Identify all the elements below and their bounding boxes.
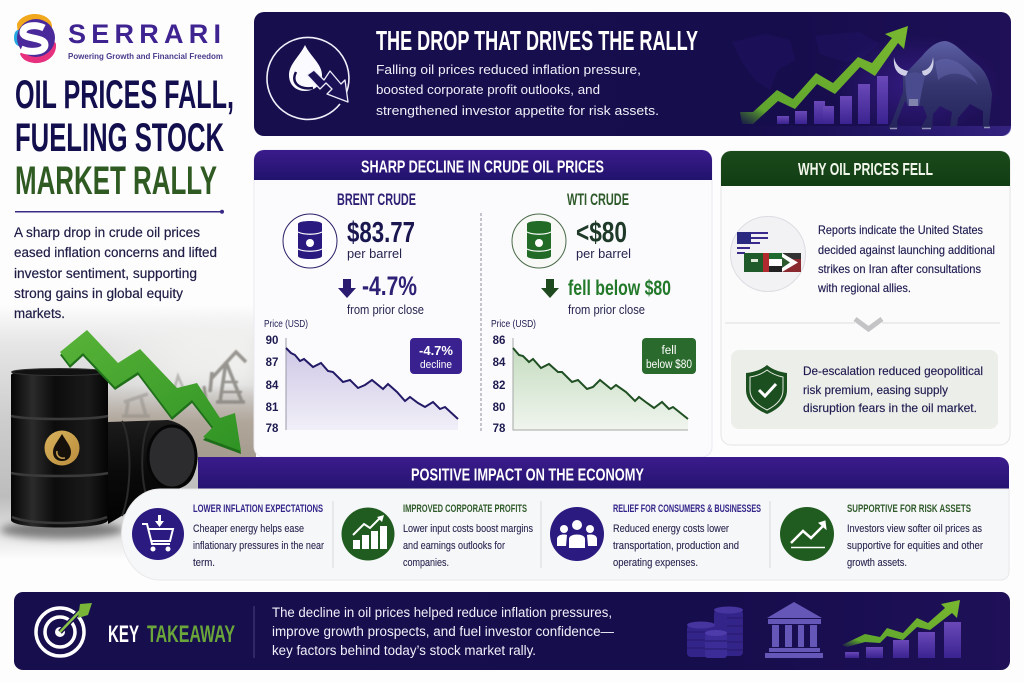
brent line chart: 81 (266, 402, 279, 414)
banner text: strengthened investor appetite for risk assets. (376, 103, 659, 118)
icon: wti down arrow (541, 279, 559, 298)
wti line chart: Price (USD) (491, 318, 536, 330)
rising bar chart (777, 76, 888, 124)
card: relief for consumers (550, 503, 761, 569)
card: improved profits: companies. (403, 557, 449, 569)
card: lower inflation (132, 503, 324, 569)
impact cards band (122, 489, 1009, 580)
card: improved profits: and earnings outlooks for (403, 540, 505, 552)
logo mark (14, 14, 56, 63)
brent line chart: Price (USD) (264, 318, 308, 330)
takeaway text: The decline in oil prices helped reduce inflation pressures, (272, 605, 612, 620)
card: risk assets: growth assets. (847, 557, 907, 569)
wti line chart: 86 (493, 335, 505, 347)
title: FUELING STOCK (15, 116, 224, 160)
intro text: eased inflation concerns and lifted (14, 245, 217, 260)
icon: oil drop with falling arrow (267, 37, 349, 119)
panel heading: SHARP DECLINE IN CRUDE OIL PRICES (361, 156, 604, 176)
icon: shield (746, 365, 787, 414)
brent unit: per barrel (347, 247, 402, 261)
card: risk assets: supportive for equities and other (847, 540, 983, 552)
reason text (817, 223, 995, 295)
brent price: $83.77 (347, 217, 415, 249)
icon: down arrow (338, 279, 356, 298)
reason text: Reports indicate the United States (818, 223, 983, 237)
takeaway text: key factors behind today’s stock market rally. (272, 643, 536, 658)
panel heading: POSITIVE IMPACT ON THE ECONOMY (411, 464, 644, 484)
takeaway text: improve growth prospects, and fuel investor confidence— (272, 624, 614, 639)
intro text: strong gains in global equity (14, 286, 183, 301)
card: relief for consumers: RELIEF FOR CONSUMERS & BUSINESSES (613, 503, 761, 515)
card: improved profits (342, 503, 533, 569)
card: lower inflation: term. (193, 557, 215, 569)
barrel shadow (0, 521, 124, 539)
title: MARKET RALLY (15, 159, 217, 203)
callout text: De-escalation reduced geopolitical (803, 364, 983, 378)
wti badge (642, 338, 696, 374)
brent line chart (264, 318, 458, 435)
icon: cart (132, 508, 184, 560)
brent heading: BRENT CRUDE (337, 191, 416, 209)
panel header (254, 150, 712, 180)
wti note: from prior close (568, 303, 645, 317)
key takeaway label (108, 621, 235, 648)
icon: target with arrow (36, 603, 92, 656)
card: risk assets (780, 503, 983, 569)
wti line chart: 78 (493, 423, 506, 435)
icon: flags (730, 216, 806, 292)
green falling arrow (60, 330, 241, 454)
card: risk assets: SUPPORTIVE FOR RISK ASSETS (847, 503, 971, 515)
logo: Serrari (14, 14, 223, 63)
intro text (14, 225, 217, 321)
brent badge: -4.7% (419, 343, 453, 358)
oil pump jacks in haze (122, 352, 246, 416)
icon: brent barrel (283, 214, 337, 268)
panel heading: WHY OIL PRICES FELL (798, 159, 933, 179)
card: relief for consumers: operating expenses. (613, 557, 698, 569)
gold oil-drop badge (44, 430, 80, 466)
card: improved profits: Lower input costs boost margins (403, 523, 533, 535)
title divider (15, 210, 224, 214)
reason text: decided against launching additional (818, 243, 995, 257)
wti line chart: 80 (493, 402, 505, 414)
intro text: markets. (14, 306, 65, 321)
callout text (803, 364, 983, 415)
top banner (254, 12, 1011, 136)
logo tagline: Powering Growth and Financial Freedom (68, 52, 223, 61)
intro text: investor sentiment, supporting (14, 266, 197, 281)
wti line chart: 84 (493, 357, 506, 369)
brent note: from prior close (347, 303, 424, 317)
reason text: strikes on Iran after consultations (818, 262, 981, 276)
callout text: disruption fears in the oil market. (803, 401, 977, 415)
key takeaway label: KEY (108, 621, 139, 648)
banner text: Falling oil prices reduced inflation pressure, (376, 62, 641, 77)
intro text: A sharp drop in crude oil prices (14, 225, 200, 240)
card: improved profits: IMPROVED CORPORATE PROFITS (403, 503, 527, 515)
card: relief for consumers: Reduced energy costs lower (613, 523, 729, 535)
panel header (721, 151, 1010, 186)
banner heading: THE DROP THAT DRIVES THE RALLY (376, 25, 698, 56)
logo wordmark: SERRARI (68, 19, 221, 49)
illustration: oil barrels and falling arrow (0, 305, 256, 560)
title: OIL PRICES FALL, (15, 73, 234, 117)
wti line chart (491, 318, 688, 435)
brent line chart: 78 (266, 423, 279, 435)
icon: chevron (855, 319, 882, 329)
callout text: risk premium, easing supply (803, 383, 948, 397)
wti unit: per barrel (576, 247, 631, 261)
title (15, 73, 234, 203)
bull (888, 41, 992, 129)
wti change: fell below $80 (568, 277, 671, 300)
wti badge: below $80 (646, 359, 692, 371)
icon: trend line (780, 507, 834, 561)
icon: wti barrel (512, 214, 566, 268)
banner text: boosted corporate profit outlooks, and (376, 82, 600, 97)
panel: why oil prices fell (721, 151, 1010, 445)
panel: positive impact on the economy (122, 457, 1009, 580)
standing oil barrel (11, 368, 108, 528)
icon: bank (765, 602, 823, 658)
key takeaway banner (14, 592, 1010, 670)
card: relief for consumers: transportation, production and (613, 540, 739, 552)
banner text (376, 62, 659, 118)
panel header (198, 457, 1009, 495)
wti heading: WTI CRUDE (567, 191, 629, 209)
takeaway text (272, 605, 614, 658)
brent line chart: 87 (266, 357, 278, 369)
wti price: <$80 (576, 217, 627, 249)
wti line chart: 82 (493, 380, 505, 392)
icon: coin stacks (687, 606, 743, 658)
brent line chart: 90 (266, 335, 278, 347)
card: lower inflation: inflationary pressures in the near (193, 540, 324, 552)
card: lower inflation: LOWER INFLATION EXPECTATIONS (193, 503, 323, 515)
icon: people (550, 507, 604, 561)
icon: rising bars and arrow (842, 600, 961, 658)
icon: rising bars (342, 508, 394, 560)
lying oil barrel (108, 420, 197, 524)
world map hint (732, 32, 880, 90)
brent change: -4.7% (362, 271, 417, 301)
rising green arrow (740, 26, 908, 124)
brent badge: decline (420, 359, 452, 371)
callout: de-escalation (731, 350, 998, 429)
reason text: with regional allies. (817, 281, 911, 295)
key takeaway label: TAKEAWAY (147, 621, 235, 648)
card: risk assets: Investors view softer oil prices as (847, 523, 982, 535)
wti badge: fell (662, 345, 676, 357)
panel: sharp decline in crude oil prices (254, 150, 712, 457)
brent line chart: 84 (266, 380, 279, 392)
card: lower inflation: Cheaper energy helps ease (193, 523, 304, 535)
brent badge (410, 338, 462, 374)
